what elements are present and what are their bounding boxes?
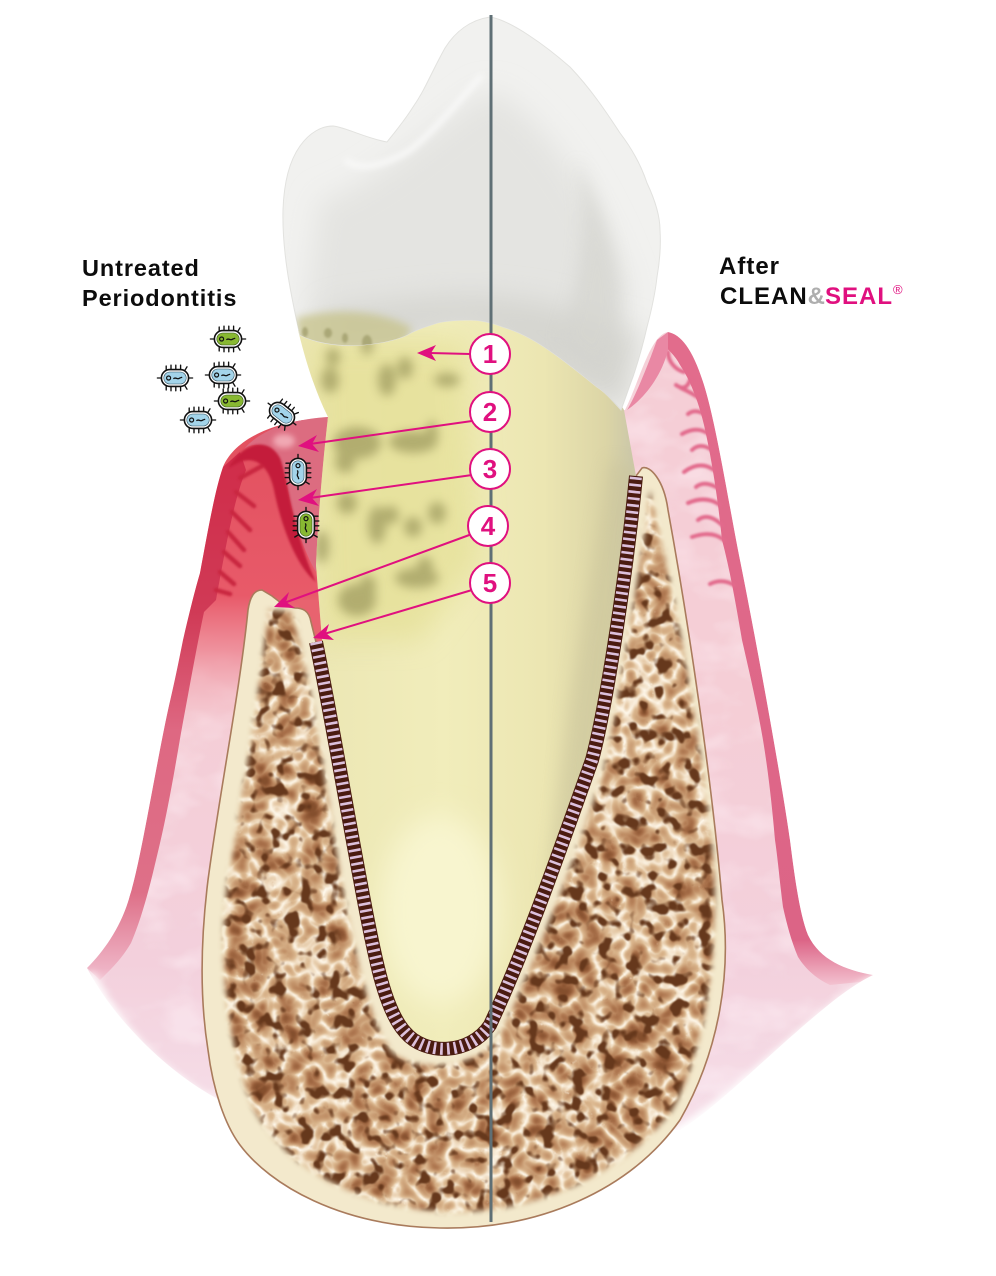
bacterium green vertical (293, 507, 319, 543)
crown ridge highlight (370, 96, 464, 167)
badge 2: 2 (483, 397, 497, 427)
root right shade (550, 513, 613, 854)
plaque yellow tint (310, 340, 480, 640)
heading: untreated periodontitis: Untreated (82, 255, 200, 281)
crown right shade (576, 184, 620, 322)
arrow 1 (417, 345, 470, 361)
bacterium blue (157, 365, 193, 391)
gum mottling (142, 362, 812, 1090)
panel: periodontal ligament (316, 476, 636, 1049)
pocket dark red band (228, 445, 316, 582)
right gum margin (627, 332, 668, 410)
divider line (490, 15, 492, 1222)
heading: after clean and seal: After (719, 253, 780, 280)
badge 3 (470, 449, 510, 489)
panel: tooth root (298, 316, 640, 1049)
bacterium blue vertical (285, 454, 311, 490)
bacterium blue (180, 407, 216, 433)
gum between bone and root (298, 600, 328, 655)
number badges (468, 334, 510, 603)
badge 1 (470, 334, 510, 374)
badge 5 (470, 563, 510, 603)
heading: after clean and seal: &SEAL (808, 283, 893, 310)
infographic: tooth cross-section (83, 15, 902, 1229)
badge 5: 5 (483, 568, 497, 598)
arrows (274, 345, 472, 640)
plaque deposits (315, 335, 460, 616)
crown plaque specks (301, 326, 373, 345)
arrow 3 (298, 475, 472, 506)
badge 2 (470, 392, 510, 432)
gum outer band right (664, 332, 873, 985)
cervical plaque on crown (296, 312, 412, 350)
panel: tooth crown (283, 17, 660, 415)
badge 4 (468, 506, 508, 546)
bacterium blue (205, 362, 241, 388)
bacteria group (157, 326, 319, 543)
heading: after clean and seal: CLEAN (720, 283, 808, 310)
periodontal pocket wall (244, 417, 328, 572)
bacterium green (210, 326, 246, 352)
arrow 4 (274, 534, 472, 608)
bacterium blue tilted (260, 393, 304, 435)
heading: after clean and seal: ® (893, 282, 903, 297)
badge 1: 1 (483, 339, 497, 369)
pocket highlight (273, 434, 295, 448)
left rete pegs (216, 466, 262, 594)
gum bottom fade (87, 975, 880, 1135)
heading: untreated periodontitis: Periodontitis (82, 285, 237, 311)
inflamed red tissue (170, 420, 328, 716)
crown lower shade (354, 296, 643, 409)
root lower glow (380, 815, 500, 1005)
panel: gum tissue (80, 330, 880, 1140)
badge 4: 4 (481, 511, 496, 541)
arrow 5 (313, 590, 472, 640)
arrow 2 (298, 421, 472, 452)
right rete pegs (668, 352, 734, 585)
crown body shade (308, 100, 584, 312)
marrow cavities (220, 492, 718, 1216)
gum outer band left (87, 452, 246, 980)
spongy bone texture (220, 490, 719, 1216)
bacterium green (214, 388, 250, 414)
panel: jaw bone (190, 450, 740, 1240)
trabecular network (220, 499, 719, 1216)
badge 3: 3 (483, 454, 497, 484)
